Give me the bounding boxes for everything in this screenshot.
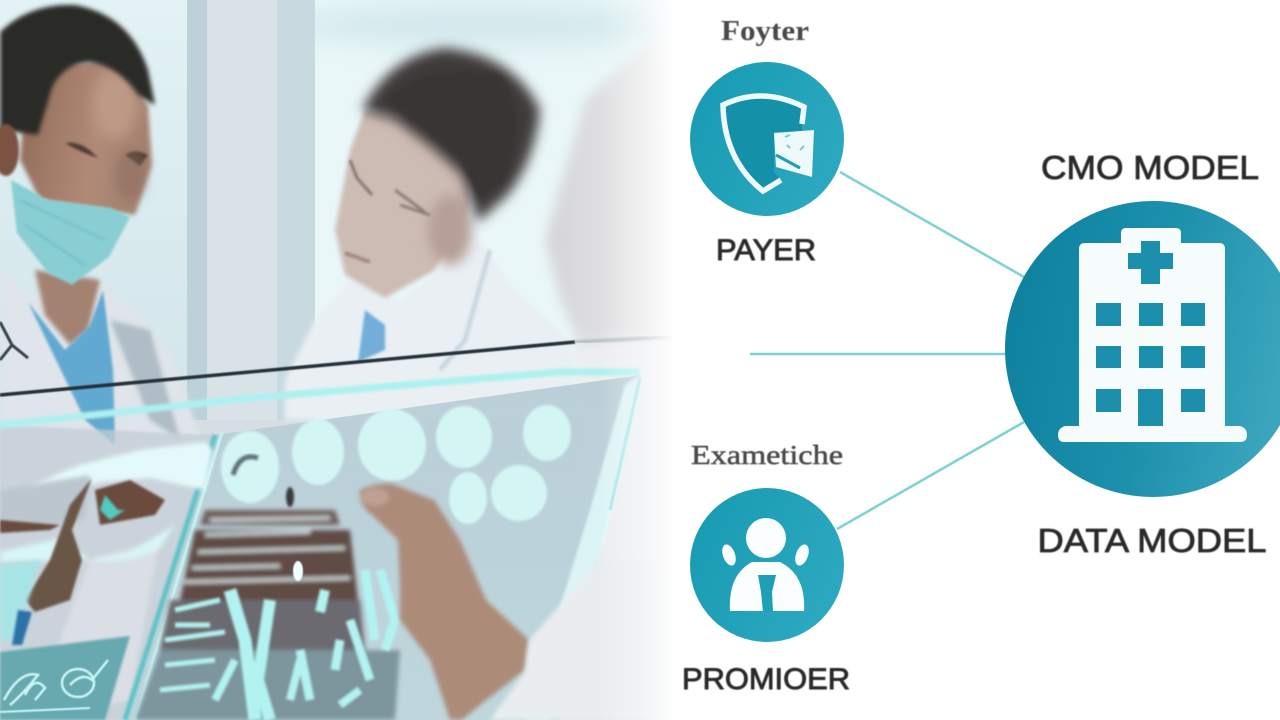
- eyes and mouth: [350, 160, 372, 195]
- background person at right: [542, 55, 658, 562]
- face: [335, 110, 470, 298]
- glass panel: [125, 375, 640, 720]
- small caption: Exametiche: [691, 440, 843, 470]
- hair: [0, 5, 155, 135]
- window and column background: [0, 0, 672, 720]
- scrubs: [28, 290, 115, 445]
- hair: [362, 48, 540, 222]
- hand holding the tablet: [360, 484, 529, 720]
- node: central hospital model: [1005, 149, 1280, 559]
- cyan glitch streaks on tablet: [160, 570, 395, 720]
- dark brown chart strokes on left: [0, 480, 165, 533]
- neck: [35, 270, 100, 345]
- heading: CMO model: CMO MODEL: [1041, 149, 1259, 186]
- dark text block on tablet: [135, 510, 400, 720]
- man clinician: [285, 48, 575, 420]
- glowing edge: [0, 372, 640, 425]
- coat: [284, 318, 315, 420]
- glowing curved bands on left: [36, 440, 214, 492]
- scan circles: [221, 405, 571, 524]
- eyes: [65, 143, 148, 166]
- white fade into diagram side: [610, 0, 672, 720]
- label: data model: DATA MODEL: [1038, 522, 1266, 559]
- lower-left teal data card: [0, 636, 130, 720]
- dark top edge: [0, 342, 575, 395]
- face mask: [11, 180, 130, 285]
- node: payer: [690, 16, 844, 267]
- stethoscope: [0, 322, 28, 360]
- icon: person with tie: [720, 518, 811, 612]
- label: PAYER: [716, 234, 816, 267]
- face: [20, 60, 152, 215]
- woman clinician: [0, 1, 197, 444]
- small caption: Foyter: [721, 16, 809, 47]
- coat: [1, 290, 197, 434]
- transparent tablet: [0, 337, 670, 720]
- white cuff and sleeve at bottom right: [490, 564, 600, 720]
- icon: hospital building: [1058, 228, 1247, 442]
- icon: shield with document: [723, 96, 814, 191]
- photo: clinicians reviewing a transparent digital tablet: [0, 0, 690, 720]
- label: PROMIOER: [682, 663, 850, 696]
- node: provider: [682, 440, 850, 696]
- connector lines: [750, 172, 1024, 529]
